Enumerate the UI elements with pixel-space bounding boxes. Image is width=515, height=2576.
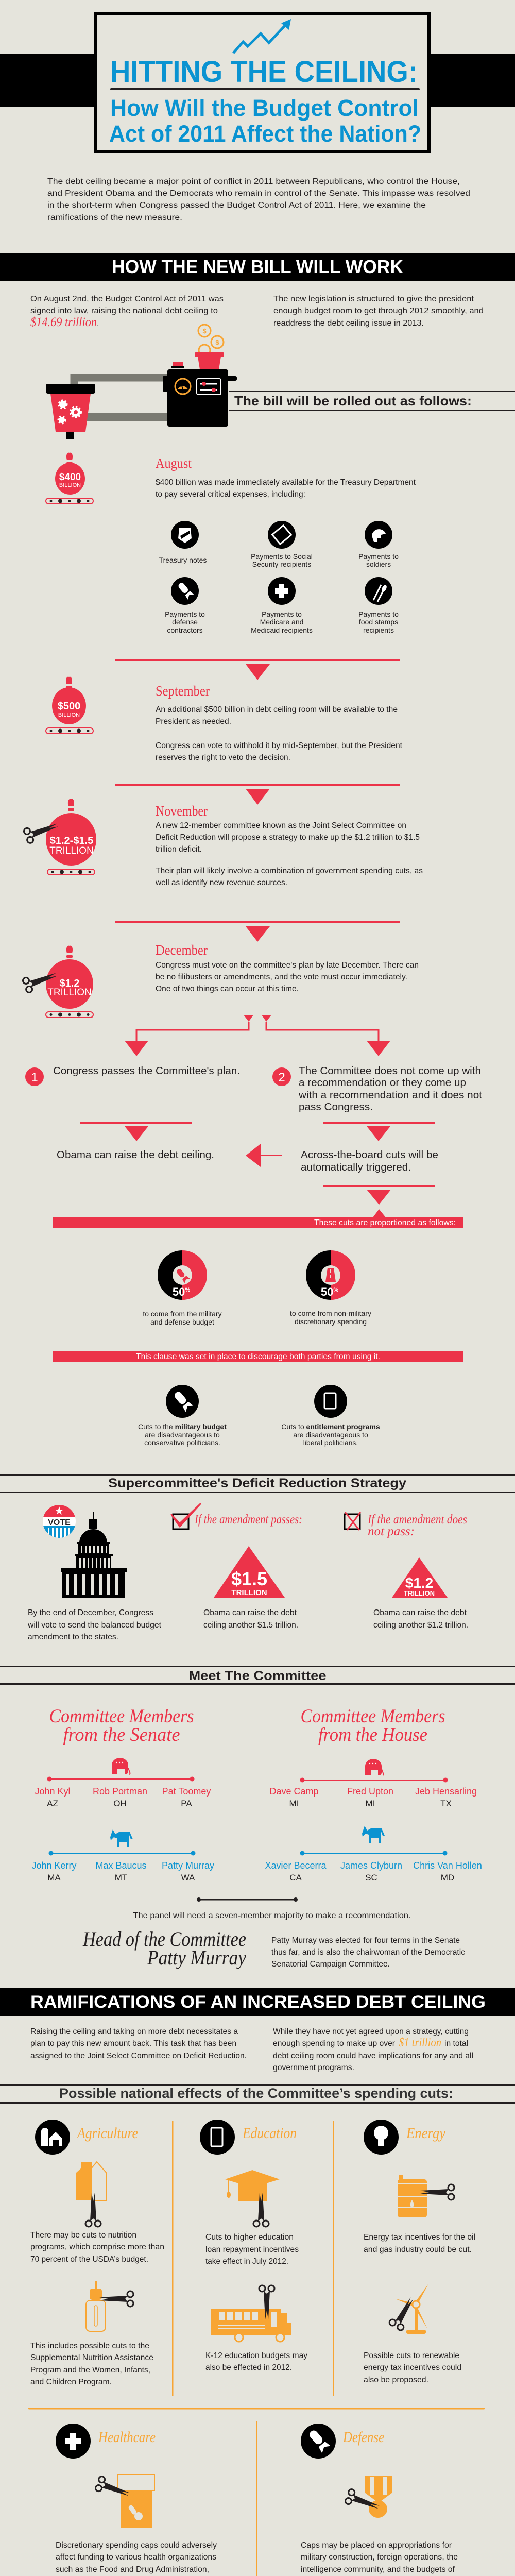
senate members: WA: [181, 1873, 195, 1883]
option 2: The Committee does not come up with: [299, 1065, 481, 1077]
banner: cuts proportioned: [53, 1217, 463, 1228]
head of committee: [82, 1927, 246, 1969]
banner: cuts proportioned: These cuts are proportioned as follows:: [314, 1218, 456, 1227]
panel: agriculture: Supplemental Nutrition Assistance: [30, 2353, 153, 2362]
text: august 2nd: [30, 295, 224, 329]
outcome: cuts triggered: [301, 1149, 438, 1173]
text: strategy: enough spending to make up over: [273, 2039, 396, 2048]
step: november: well as identify new revenue sources.: [155, 878, 287, 887]
heading: supercommittee strategy: [0, 1474, 515, 1493]
pie: military 50%: to come from the military: [143, 1310, 222, 1318]
senate members: [31, 1706, 214, 1883]
title banner: [0, 13, 515, 151]
house members: MD: [441, 1873, 454, 1883]
text: strategy: in total: [444, 2039, 468, 2048]
heading: meet the committee: [0, 1666, 515, 1685]
senate members: Rob Portman: [93, 1786, 147, 1797]
text: new legislation: The new legislation is structured to give the president: [273, 295, 474, 303]
house members: [265, 1706, 482, 1883]
panel: healthcare: such as the Food and Drug Administration,: [56, 2565, 209, 2574]
illustration: budget machine: $: [202, 327, 207, 335]
house members: Chris Van Hollen: [413, 1860, 482, 1871]
step: september: reserves the right to veto the decision.: [156, 753, 290, 762]
option 2: a recommendation or they come up: [299, 1077, 466, 1089]
icon: card: [268, 521, 296, 549]
house members: Fred Upton: [347, 1786, 393, 1797]
heading: possible national effects: Possible national effects of the Committee’s spending cuts:: [59, 2086, 453, 2101]
panel: education: loan repayment incentives: [205, 2245, 299, 2254]
head of committee: Patty Murray: [147, 1946, 246, 1969]
icon: cross: [268, 577, 296, 605]
panel: education: K-12 education budgets may: [205, 2351, 307, 2360]
labels: Medicare and: [260, 618, 303, 626]
step: august: August: [156, 455, 192, 471]
step: august: [156, 455, 416, 499]
text: august 2nd: signed into law, raising the national debt ceiling to: [30, 307, 218, 315]
icon: $500 billion bag: [46, 677, 93, 734]
panel: healthcare: affect funding to various health organizations: [56, 2553, 216, 2562]
text: raising the ceiling: assigned to the Joint Select Committee on Deficit Reduction.: [30, 2052, 247, 2060]
flow arrows: split: [125, 1015, 390, 1056]
labels: Medicaid recipients: [251, 626, 313, 634]
house members: James Clyburn: [340, 1860, 402, 1871]
icon: missile: [171, 577, 199, 605]
icon: treasury: [171, 521, 199, 549]
pie: non-military 50%: discretionary spending: [295, 1317, 367, 1326]
panel: healthcare: [56, 2424, 217, 2576]
labels: Treasury notes: [159, 556, 207, 564]
option 1: [25, 1065, 240, 1086]
option: amendment passes: TRILLION: [231, 1588, 267, 1597]
consequence: entitlement: [281, 1385, 380, 1447]
panel: education: Education: [242, 2125, 297, 2142]
pie: military 50%: %: [185, 1287, 190, 1293]
option: amendment does not pass: TRILLION: [404, 1589, 435, 1597]
option: amendment does not pass: Obama can raise the debt: [373, 1608, 467, 1617]
consequence: entitlement: are disadvantageous to: [293, 1431, 368, 1439]
panel: agriculture: and Children Program.: [30, 2378, 112, 2386]
labels: Security recipients: [252, 560, 311, 568]
arrow: to september: [115, 659, 400, 680]
panel: education: Cuts to higher education: [205, 2233, 294, 2242]
text: strategy: government programs.: [273, 2063, 354, 2072]
labels: [159, 552, 399, 634]
panel: defense: intelligence community, and the budgets of: [301, 2565, 455, 2574]
heading: meet the committee: Meet The Committee: [188, 1669, 327, 1683]
house members: from the House: [318, 1724, 427, 1745]
text: balanced budget: By the end of December, Congress: [28, 1608, 153, 1617]
panel: healthcare: Healthcare: [98, 2429, 156, 2446]
text: new legislation: [273, 295, 484, 328]
senate members: John Kyl: [35, 1786, 71, 1797]
icon: rising arrow: [233, 19, 291, 53]
step: november: November: [156, 803, 208, 819]
arrow: to december: [115, 921, 400, 942]
text: raising the ceiling: [30, 2027, 247, 2060]
house members: Dave Camp: [269, 1786, 319, 1797]
icons: critical expenses: [159, 521, 399, 634]
icon: vote badge: [43, 1505, 76, 1538]
step: december: Congress must vote on the committee's plan by late December. There can: [156, 961, 419, 970]
title: HITTING THE CEILING:: [110, 55, 418, 89]
step: september: September: [156, 683, 210, 699]
step: november: Their plan will likely involve a combination of government spending cuts, as: [156, 867, 423, 875]
labels: food stamps: [359, 618, 398, 626]
consequence: military: conservative politicians.: [144, 1438, 220, 1447]
consequence: military: Cuts to the military budget: [138, 1422, 227, 1431]
text: august 2nd: On August 2nd, the Budget Control Act of 2011 was: [30, 295, 224, 303]
panel: education: take effect in July 2012.: [205, 2257, 288, 2266]
pie: non-military 50%: 50: [321, 1285, 333, 1298]
senate members: Pat Toomey: [162, 1786, 211, 1797]
labels: contractors: [167, 626, 203, 634]
text: raising the ceiling: plan to pay this new amount back. This task that has been: [30, 2039, 236, 2048]
panel: energy: also be proposed.: [364, 2376, 428, 2384]
senate members: Max Baucus: [95, 1860, 147, 1871]
text: strategy: $1 trillion: [399, 2036, 441, 2049]
arrow: to cuts: [323, 1185, 435, 1217]
labels: defense: [172, 618, 198, 626]
icon: $1.2-$1.5 trillion bag: TRILLION: [49, 845, 94, 856]
heading: possible national effects: [0, 2084, 515, 2104]
option: amendment does not pass: ceiling another $1.2 trillion.: [373, 1621, 468, 1630]
senate members: PA: [181, 1799, 192, 1808]
step: december: One of two things can occur at this time.: [156, 985, 299, 993]
text: august 2nd: $14.69 trillion: [30, 315, 97, 329]
labels: Payments to: [262, 610, 302, 618]
icon: $500 billion bag: $500: [58, 701, 80, 712]
text: patty murray bio: [271, 1936, 465, 1969]
icon: $400 billion bag: BILLION: [59, 482, 81, 488]
pie: military 50%: [143, 1250, 222, 1326]
text: strategy: While they have not yet agreed upon a strategy, cutting: [273, 2027, 469, 2036]
icon: helmet: [365, 521, 392, 549]
intro text: and President Obama and the Democrats who remain in control of the Senate. This impasse was resolved: [47, 189, 470, 198]
panel: energy: Possible cuts to renewable: [364, 2351, 459, 2360]
house members: SC: [365, 1873, 377, 1883]
icon: $500 billion bag: BILLION: [58, 712, 80, 718]
senate members: from the Senate: [63, 1724, 180, 1745]
panel: agriculture: 70 percent of the USDA’s budget.: [30, 2255, 148, 2264]
panel: energy: Energy tax incentives for the oil: [364, 2233, 475, 2242]
panel: defense: military construction, foreign operations, the: [301, 2553, 458, 2562]
step: november: trillion deficit.: [156, 845, 202, 854]
panel: agriculture: programs, which comprise more than: [30, 2243, 164, 2251]
panel: agriculture: This includes possible cuts to the: [30, 2342, 149, 2350]
icon: $1.2 trillion bag: [22, 946, 93, 1018]
option: amendment passes: $1.5: [231, 1568, 267, 1589]
option 2: pass Congress.: [299, 1101, 373, 1113]
labels: Payments to: [358, 552, 399, 561]
option: amendment does not pass: not pass:: [368, 1524, 415, 1538]
heading: supercommittee strategy: Supercommittee's Deficit Reduction Strategy: [108, 1476, 406, 1490]
consequence: entitlement: liberal politicians.: [303, 1438, 358, 1447]
text: raising the ceiling: Raising the ceiling and taking on more debt necessitates a: [30, 2027, 238, 2036]
panel: healthcare: Discretionary spending caps could adversely: [56, 2541, 217, 2550]
icon: fork and spoon: [365, 577, 392, 605]
text: seven-member majority: [133, 1897, 411, 1920]
icon: $1.2-$1.5 trillion bag: $1.2-$1.5: [50, 835, 93, 846]
head of committee: Head of the Committee: [82, 1927, 246, 1951]
senate members: John Kerry: [31, 1860, 77, 1871]
step: september: President as needed.: [156, 717, 231, 726]
text: strategy: [273, 2027, 473, 2072]
text: patty murray bio: Patty Murray was elected for four terms in the Senate: [271, 1936, 460, 1945]
text: strategy: debt ceiling room could have implications for any and all: [273, 2052, 473, 2060]
panel: education: [200, 2120, 307, 2372]
outcome: cuts triggered: Across-the-board cuts will be: [301, 1149, 438, 1161]
intro text: in the short-term when Congress passed the Budget Control Act of 2011. Here, we examine the: [47, 201, 426, 210]
heading: how the new bill will work: [0, 253, 515, 281]
intro text: The debt ceiling became a major point of conflict in 2011 between Republicans, who control the House,: [47, 177, 460, 186]
illustration: budget machine: $: [215, 338, 219, 346]
house members: CA: [289, 1873, 302, 1883]
icon: $1.2-$1.5 trillion bag: [23, 799, 96, 875]
senate members: AZ: [47, 1799, 58, 1808]
consequence: military: [138, 1385, 227, 1447]
house members: Jeb Hensarling: [415, 1786, 477, 1797]
pie: military 50%: and defense budget: [150, 1318, 214, 1326]
icon: $400 billion bag: [46, 453, 93, 504]
banner: clause: [53, 1351, 463, 1362]
text: patty murray bio: Senatorial Campaign Committee.: [271, 1960, 390, 1969]
consequence: military: are disadvantageous to: [145, 1431, 220, 1439]
labels: recipients: [363, 626, 394, 634]
step: december: December: [156, 942, 208, 958]
panel: agriculture: Agriculture: [76, 2125, 138, 2142]
step: december: be no filibusters or amendments, and the vote must occur immediately.: [156, 973, 407, 981]
outcome: cuts triggered: automatically triggered.: [301, 1162, 411, 1173]
text: patty murray bio: thus far, and is also the chairwoman of the Democratic: [271, 1948, 465, 1957]
labels: Payments to Social: [251, 552, 313, 561]
icon: capitol: [61, 1512, 127, 1598]
subtitle: How Will the Budget Control: [110, 95, 419, 121]
pie: military 50%: 50: [173, 1285, 185, 1298]
intro text: [47, 177, 470, 222]
option: amendment passes: Obama can raise the debt: [203, 1608, 297, 1617]
option: amendment does not pass: [345, 1512, 468, 1630]
step: september: [156, 683, 403, 762]
house members: MI: [366, 1799, 375, 1808]
consequence: entitlement: Cuts to entitlement programs: [281, 1422, 380, 1431]
senate members: MA: [47, 1873, 61, 1883]
icon: $400 billion bag: $400: [59, 472, 81, 483]
senate members: Patty Murray: [162, 1860, 214, 1871]
house members: MI: [289, 1799, 299, 1808]
intro text: ramifications of the new measure.: [47, 213, 182, 222]
pie: non-military 50%: %: [333, 1287, 338, 1293]
text: balanced budget: [27, 1608, 162, 1641]
option: amendment passes: ceiling another $1.5 trillion.: [203, 1621, 298, 1630]
panel: defense: Caps may be placed on appropriations for: [301, 2541, 452, 2550]
text: seven-member majority: The panel will need a seven-member majority to make a recommendation.: [133, 1911, 411, 1920]
text: balanced budget: amendment to the states.: [28, 1633, 118, 1641]
text: new legislation: readdress the debt ceiling issue in 2013.: [273, 319, 424, 328]
house members: TX: [440, 1799, 452, 1808]
text: august 2nd: .: [97, 319, 99, 328]
labels: Payments to: [358, 610, 399, 618]
text: balanced budget: will vote to send the balanced budget: [27, 1621, 162, 1630]
outcome: raise ceiling: Obama can raise the debt ceiling.: [57, 1149, 214, 1161]
senate members: OH: [113, 1799, 127, 1808]
step: september: Congress can vote to withhold it by mid-September, but the President: [156, 741, 403, 750]
icon: vote badge: VOTE: [48, 1518, 71, 1527]
option: amendment passes: [171, 1504, 302, 1630]
heading: how the new bill will work: HOW THE NEW BILL WILL WORK: [112, 256, 403, 277]
icon: $1.2 trillion bag: TRILLION: [47, 987, 92, 998]
option 2: [272, 1065, 482, 1113]
dividers: [28, 2121, 485, 2576]
senate members: Committee Members: [49, 1706, 194, 1727]
arrow: to november: [115, 784, 400, 805]
step: november: A new 12-member committee known as the Joint Select Committee on: [156, 821, 406, 830]
labels: soldiers: [366, 560, 391, 568]
senate members: MT: [115, 1873, 127, 1883]
option 2: with a recommendation and it does not: [298, 1090, 482, 1101]
banner: clause: This clause was set in place to discourage both parties from using it.: [136, 1352, 380, 1361]
step: december: [156, 942, 419, 993]
house members: Xavier Becerra: [265, 1860, 327, 1871]
step: november: [155, 803, 423, 887]
pie: non-military 50%: [290, 1250, 371, 1326]
labels: Payments to: [165, 610, 205, 618]
option 1: Congress passes the Committee's plan.: [53, 1065, 240, 1077]
panel: defense: [301, 2424, 465, 2576]
panel: agriculture: There may be cuts to nutrition: [30, 2231, 136, 2240]
option: amendment does not pass: If the amendment does: [367, 1513, 467, 1527]
step: august: $400 billion was made immediately available for the Treasury Department: [156, 478, 416, 487]
step: august: to pay several critical expenses, including:: [156, 490, 305, 499]
option 2: 2: [278, 1071, 285, 1084]
option: amendment does not pass: $1.2: [405, 1575, 433, 1591]
heading: bill rolled out: [229, 391, 515, 411]
heading: ramifications: RAMIFICATIONS OF AN INCREASED DEBT CEILING: [30, 1992, 486, 2012]
panel: education: also be effected in 2012.: [205, 2363, 292, 2372]
step: september: An additional $500 billion in debt ceiling room will be available to the: [156, 705, 398, 714]
panel: defense: Defense: [342, 2429, 384, 2446]
step: november: Deficit Reduction will propose a strategy to make up the $1.2 trillion to $1.5: [156, 833, 420, 842]
panel: agriculture: Program and the Women, Infants,: [30, 2366, 150, 2375]
panel: energy: energy tax incentives could: [364, 2363, 461, 2372]
panel: agriculture: [30, 2120, 164, 2386]
outcome arrows: [80, 1122, 435, 1141]
panel: energy: Energy: [406, 2125, 446, 2142]
house members: Committee Members: [301, 1706, 445, 1727]
panel: energy: and gas industry could be cut.: [364, 2245, 472, 2254]
option 1: 1: [31, 1071, 38, 1084]
pie: non-military 50%: to come from non-military: [290, 1309, 371, 1317]
illustration: budget machine: [46, 325, 237, 439]
icon: $1.2 trillion bag: $1.2: [60, 978, 79, 989]
arrow: left: [246, 1144, 282, 1167]
panel: energy: [364, 2120, 475, 2384]
option: amendment passes: If the amendment passes:: [194, 1513, 302, 1527]
heading: bill rolled out: The bill will be rolled out as follows:: [234, 393, 472, 409]
heading: ramifications: [0, 1988, 515, 2016]
title banner: Act of 2011 Affect the Nation?: [109, 121, 421, 147]
text: new legislation: enough budget room to get through 2012 smoothly, and: [273, 307, 484, 315]
